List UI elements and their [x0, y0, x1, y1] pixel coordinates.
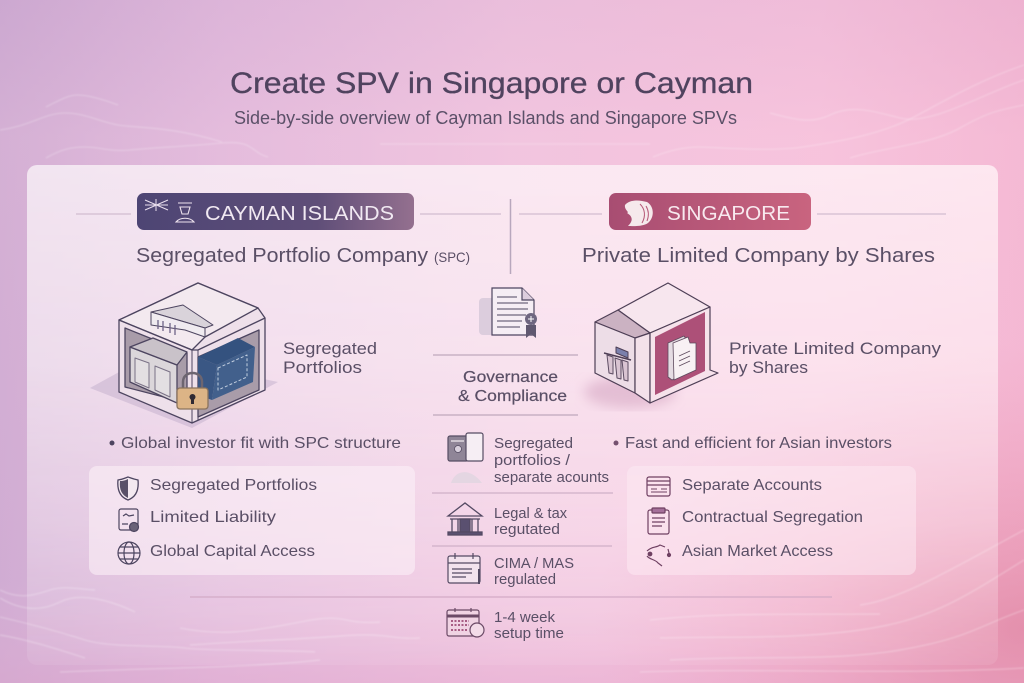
- card: Singapore features: Separate Accounts: [682, 477, 822, 494]
- icon: columns: [604, 347, 631, 381]
- icon: globe: [118, 542, 140, 564]
- icon: padlock: [177, 373, 208, 409]
- heading: Cayman entity: Segregated Portfolio Company: [136, 245, 428, 267]
- heading: Governance & Compliance: [458, 369, 567, 405]
- row: setup time: 1-4 week: [494, 610, 556, 626]
- row: legal and tax: Legal & tax: [494, 506, 568, 522]
- bullet: Singapore: Fast and efficient for Asian investors: [625, 435, 892, 452]
- icon: liability document: [119, 509, 138, 532]
- badge: Cayman Islands: [137, 193, 414, 230]
- icon: document: [668, 336, 696, 380]
- icon: calendar: [448, 553, 480, 584]
- illustration: Singapore building: [584, 283, 718, 408]
- row: CIMA / MAS: [448, 553, 574, 588]
- label: Segregated Portfolios: [283, 339, 377, 377]
- icon: accounts: [647, 477, 670, 496]
- badge: Cayman Islands: CAYMAN ISLANDS: [205, 203, 394, 225]
- decorative waves over panel: [0, 530, 1024, 672]
- heading: Governance & Compliance: Governance: [463, 369, 558, 386]
- card: Cayman features: [89, 466, 415, 575]
- card: Singapore features: [627, 466, 916, 575]
- bullet: Cayman: Global investor fit with SPC structure: [121, 435, 401, 452]
- row: segregated portfolios: portfolios /: [494, 453, 571, 469]
- label: Segregated Portfolios: Portfolios: [283, 358, 362, 377]
- card: Singapore features: Asian Market Access: [682, 543, 833, 560]
- row: CIMA / MAS: regulated: [494, 572, 556, 588]
- heading: Singapore entity: Private Limited Company by Shares: [582, 245, 935, 267]
- row: segregated portfolios: Segregated: [494, 436, 573, 452]
- icon: crest: [176, 203, 194, 222]
- icon: contract clipboard: [648, 508, 669, 534]
- label: Private Limited Company by Shares: by Shares: [729, 358, 808, 377]
- title: Create SPV in Singapore or Cayman: [230, 67, 753, 100]
- row: segregated portfolios: separate acounts: [494, 470, 609, 486]
- row: setup time: setup time: [494, 626, 564, 642]
- main panel: [27, 165, 998, 665]
- label: Private Limited Company by Shares: [729, 339, 942, 377]
- illustration: Cayman vault building: [90, 283, 278, 428]
- heading: Cayman entity: (SPC): [434, 249, 470, 265]
- icon: certificate document: [479, 288, 537, 338]
- row: segregated portfolios: [448, 433, 609, 486]
- label: Segregated Portfolios: Segregated: [283, 339, 377, 358]
- row: legal and tax: [448, 503, 568, 538]
- row: CIMA / MAS: CIMA / MAS: [494, 556, 574, 572]
- card: Cayman features: Segregated Portfolios: [150, 477, 317, 494]
- icon: flag: [145, 199, 168, 211]
- card: Cayman features: Global Capital Access: [150, 543, 315, 560]
- icon: folder and account: [448, 433, 483, 483]
- heading: Governance & Compliance: & Compliance: [458, 388, 567, 405]
- subtitle: Side-by-side overview of Cayman Islands and Singapore SPVs: [234, 107, 737, 128]
- icon: merlion: [625, 200, 653, 226]
- badge: Singapore: SINGAPORE: [667, 203, 790, 225]
- card: Singapore features: Contractual Segregation: [682, 509, 863, 526]
- icon: asia map: [647, 545, 670, 566]
- row: setup time: [447, 608, 564, 642]
- row: legal and tax: regutated: [494, 522, 560, 538]
- label: Private Limited Company by Shares: Private Limited Company: [729, 339, 942, 358]
- badge: Singapore: [609, 193, 811, 230]
- icon: shield: [118, 477, 138, 500]
- icon: courthouse: [448, 503, 482, 535]
- icon: calendar with clock: [447, 608, 484, 637]
- card: Cayman features: Limited Liability: [150, 509, 276, 526]
